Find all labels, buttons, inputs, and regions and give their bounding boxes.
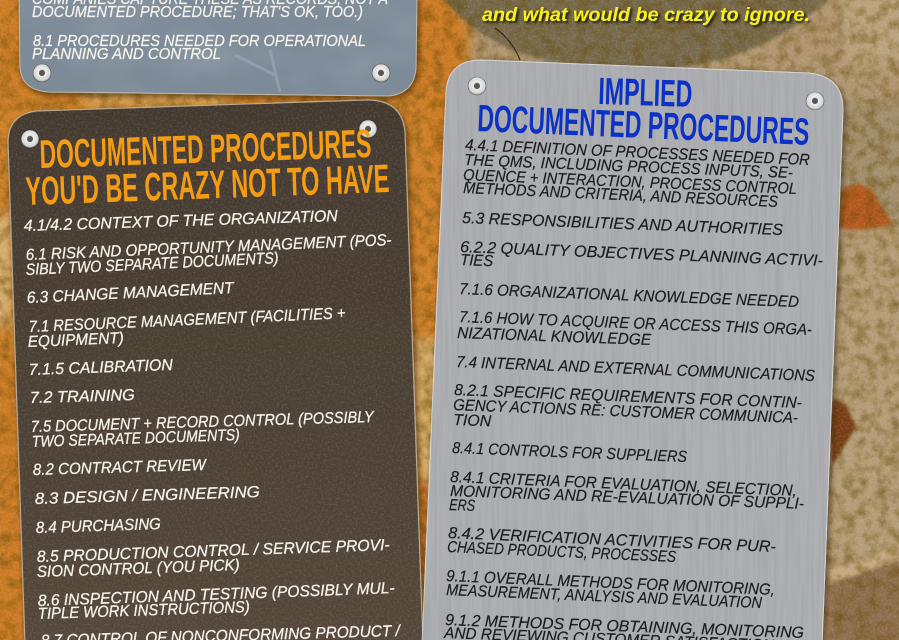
heading: implied documented procedures: [477, 71, 810, 154]
dark plate list: 7.2 TRAINING: [30, 387, 135, 407]
steel plate text: PLANNING AND CONTROL: [32, 46, 221, 63]
heading: documented procedures you'd be crazy not to have: YOU'D BE CRAZY NOT TO HAVE: [25, 157, 390, 214]
silver plate list: 7.1.6 HOW TO ACQUIRE OR ACCESS THIS ORGA-: [459, 309, 812, 339]
icon: screw: [21, 130, 39, 148]
dark plate list: 7.5 DOCUMENT + RECORD CONTROL (POSSIBLY: [31, 409, 375, 436]
silver plate list: 5.3 RESPONSIBILITIES AND AUTHORITIES: [462, 210, 784, 239]
steel plate text: [32, 0, 388, 63]
dark plate list: [24, 208, 401, 640]
silver plate list: MONITORING AND RE-EVALUATION OF SUPPLI-: [450, 483, 804, 513]
dark plate list: TIPLE WORK INSTRUCTIONS): [38, 599, 250, 623]
silver plate list: 9.1.1 OVERALL METHODS FOR MONITORING,: [446, 568, 775, 599]
steel plate text: 8.1 PROCEDURES NEEDED FOR OPERATIONAL: [33, 33, 366, 50]
dark plate list: 4.1/4.2 CONTEXT OF THE ORGANIZATION: [24, 208, 338, 235]
dark plate list: 7.1.5 CALIBRATION: [29, 357, 173, 379]
silver plate list: TIES: [460, 252, 494, 270]
dark plate list: 6.3 CHANGE MANAGEMENT: [26, 280, 235, 307]
steel plate text: DOCUMENTED PROCEDURE; THAT'S OK, TOO.): [32, 4, 363, 21]
silver plate list: [443, 137, 823, 640]
dark plate list: 8.6 INSPECTION AND TESTING (POSSIBLY MUL-: [38, 580, 395, 610]
silver plate list: 7.1.6 ORGANIZATIONAL KNOWLEDGE NEEDED: [459, 281, 800, 311]
dark plate list: TWO SEPARATE DOCUMENTS): [32, 427, 240, 451]
icon: screw: [33, 64, 51, 82]
panel: steel plate with procedures: [19, 0, 417, 96]
dark plate list: EQUIPMENT): [27, 330, 124, 351]
silver plate list: 8.4.1 CONTROLS FOR SUPPLIERS: [452, 440, 688, 466]
dark plate list: SIBLY TWO SEPARATE DOCUMENTS): [25, 250, 279, 279]
silver plate list: 6.2.2 QUALITY OBJECTIVES PLANNING ACTIVI-: [460, 239, 823, 270]
dark plate list: 6.1 RISK AND OPPORTUNITY MANAGEMENT (POS-: [25, 232, 392, 264]
silver plate list: 8.4.1 CRITERIA FOR EVALUATION, SELECTION,: [450, 469, 797, 500]
silver plate list: 8.4.2 VERIFICATION ACTIVITIES FOR PUR-: [448, 525, 776, 556]
silver plate list: CHASED PRODUCTS, PROCESSES: [447, 539, 677, 566]
silver plate list: 8.2.1 SPECIFIC REQUIREMENTS FOR CONTIN-: [454, 382, 802, 412]
dark plate list: 7.1 RESOURCE MANAGEMENT (FACILITIES +: [28, 305, 346, 336]
heading: documented procedures you'd be crazy not to have: [25, 122, 390, 214]
heading: implied documented procedures: IMPLIED: [598, 71, 693, 116]
silver plate list: ERS: [449, 497, 476, 515]
silver plate list: METHODS AND CRITERIA, AND RESOURCES: [463, 180, 779, 211]
icon: screw: [372, 64, 390, 82]
silver plate list: GENCY ACTIONS RE: CUSTOMER COMMUNICA-: [453, 397, 798, 427]
heading: documented procedures you'd be crazy not to have: DOCUMENTED PROCEDURES: [39, 122, 372, 177]
icon: screw: [468, 77, 486, 95]
panel: dark plate: [8, 100, 423, 640]
dark plate list: 8.4 PURCHASING: [36, 516, 161, 537]
silver plate list: QUENCE + INTERACTION, PROCESS CONTROL: [463, 167, 797, 198]
dark plate list: SION CONTROL (YOU PICK): [37, 557, 240, 581]
silver plate list: 7.4 INTERNAL AND EXTERNAL COMMUNICATIONS: [456, 354, 816, 385]
silver plate list: NIZATIONAL KNOWLEDGE: [457, 325, 652, 349]
silver plate list: TION: [453, 412, 492, 430]
dark plate list: 8.2 CONTRACT REVIEW: [33, 457, 208, 479]
dark plate list: 8.3 DESIGN / ENGINEERING: [35, 484, 260, 508]
callout: yellow tagline: and what would be crazy to ignore.: [482, 5, 810, 26]
silver plate list: 4.4.1 DEFINITION OF PROCESSES NEEDED FOR: [465, 137, 811, 169]
silver plate list: THE QMS, INCLUDING PROCESS INPUTS, SE-: [464, 152, 793, 182]
dark plate list: 8.5 PRODUCTION CONTROL / SERVICE PROVI-: [37, 537, 390, 566]
dark stone circle behind yellow tagline: [440, 0, 832, 71]
icon: screw: [359, 120, 377, 138]
icon: screw: [806, 92, 824, 110]
panel: silver plate: [422, 60, 843, 640]
silver plate list: MEASUREMENT, ANALYSIS AND EVALUATION: [446, 582, 763, 612]
